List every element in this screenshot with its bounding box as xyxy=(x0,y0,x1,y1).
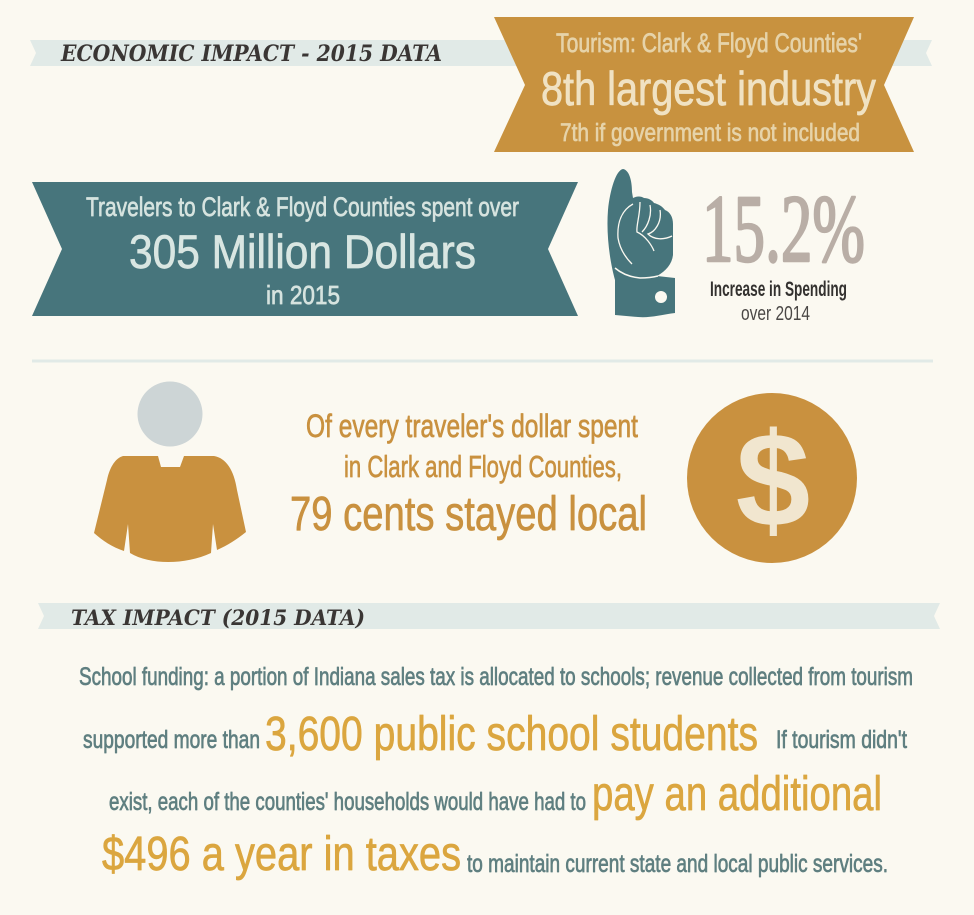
banner: traveler spending xyxy=(32,182,578,316)
section heading: economic impact: ECONOMIC IMPACT - 2015 DATA xyxy=(60,41,442,67)
icon: pointing hand xyxy=(607,169,675,317)
section heading: tax impact: TAX IMPACT (2015 DATA) xyxy=(71,605,365,630)
banner: traveler spending: 305 Million Dollars xyxy=(129,225,476,278)
banner: tourism industry rank: 7th if government is not included xyxy=(560,119,860,147)
text block: tax impact paragraph xyxy=(79,663,913,881)
icon: dollar coin: $ xyxy=(736,406,810,555)
stat: 15.2% increase in spending: Increase in Spending xyxy=(710,278,847,301)
text block: tax impact paragraph: If tourism didn't xyxy=(776,726,907,754)
text block: tax impact paragraph: 3,600 public school students xyxy=(265,708,758,761)
banner: traveler spending: Travelers to Clark & Floyd Counties spent over xyxy=(86,192,519,222)
stat: 15.2% increase in spending: over 2014 xyxy=(741,303,810,325)
stat: 15.2% increase in spending: 15.2% xyxy=(702,175,865,282)
text block: tax impact paragraph: exist, each of the counties' households would have had to xyxy=(109,788,586,816)
text: 79 cents stayed local xyxy=(290,408,647,541)
text block: tax impact paragraph: pay an additional xyxy=(592,768,882,821)
text block: tax impact paragraph: supported more than xyxy=(83,726,260,754)
text: 79 cents stayed local: Of every traveler's dollar spent xyxy=(306,408,638,444)
icon: dollar coin xyxy=(687,393,857,563)
banner: tourism industry rank: 8th largest industry xyxy=(541,62,876,115)
section heading: tax impact xyxy=(38,603,940,630)
text block: tax impact paragraph: $496 a year in taxes xyxy=(102,828,461,881)
banner: tourism industry rank: Tourism: Clark & Floyd Counties' xyxy=(556,28,862,58)
stat: 15.2% increase in spending xyxy=(702,175,865,325)
icon: person xyxy=(94,382,246,562)
banner: tourism industry rank xyxy=(494,17,914,152)
text: 79 cents stayed local: in Clark and Floyd Counties, xyxy=(344,449,622,484)
text: 79 cents stayed local: 79 cents stayed local xyxy=(290,488,647,541)
banner: traveler spending: in 2015 xyxy=(266,280,340,310)
section heading: economic impact xyxy=(30,40,932,67)
